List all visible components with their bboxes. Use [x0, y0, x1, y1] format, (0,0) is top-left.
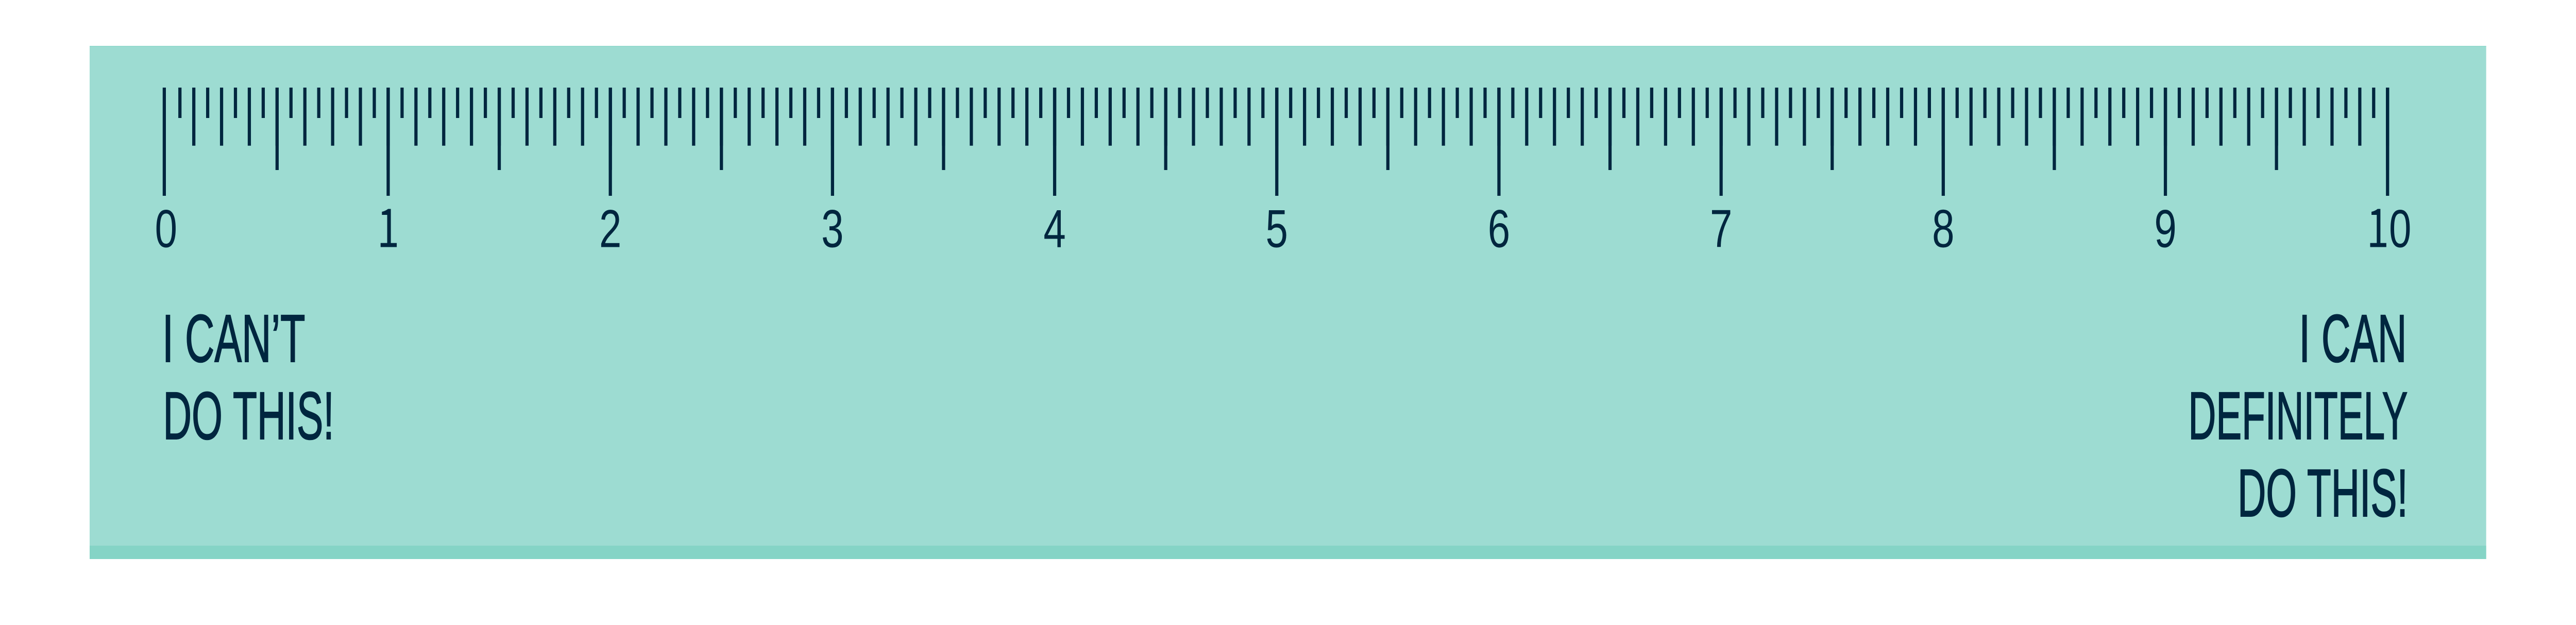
scale numbers 0 to 10	[155, 185, 2411, 263]
panel: ruler body	[90, 46, 2486, 559]
scale numbers 0 to 10: 9	[2154, 199, 2177, 259]
scale numbers 0 to 10: 10	[2367, 185, 2411, 263]
label: low end of scale: DO THIS!	[163, 378, 334, 453]
label: high end of scale: I CAN	[2299, 300, 2407, 376]
label: high end of scale: DO THIS!	[2238, 455, 2408, 531]
scale numbers 0 to 10: 4	[1043, 199, 1066, 259]
scale numbers 0 to 10: 8	[1932, 199, 1955, 259]
scale numbers 0 to 10: 0	[155, 199, 177, 259]
ruler bottom edge strip	[90, 546, 2486, 559]
scale numbers 0 to 10: 2	[599, 199, 621, 259]
scale numbers 0 to 10: 6	[1488, 199, 1510, 259]
label: high end of scale	[2188, 300, 2408, 531]
label: high end of scale: DEFINITELY	[2188, 378, 2408, 453]
scale numbers 0 to 10: 7	[1710, 199, 1732, 259]
scale numbers 0 to 10: 3	[821, 199, 844, 259]
ruler tick marks	[164, 88, 2389, 196]
scale numbers 0 to 10: 1	[377, 185, 399, 263]
label: low end of scale	[162, 300, 334, 453]
scale numbers 0 to 10: 5	[1266, 199, 1288, 259]
label: low end of scale: I CAN’T	[162, 300, 305, 376]
